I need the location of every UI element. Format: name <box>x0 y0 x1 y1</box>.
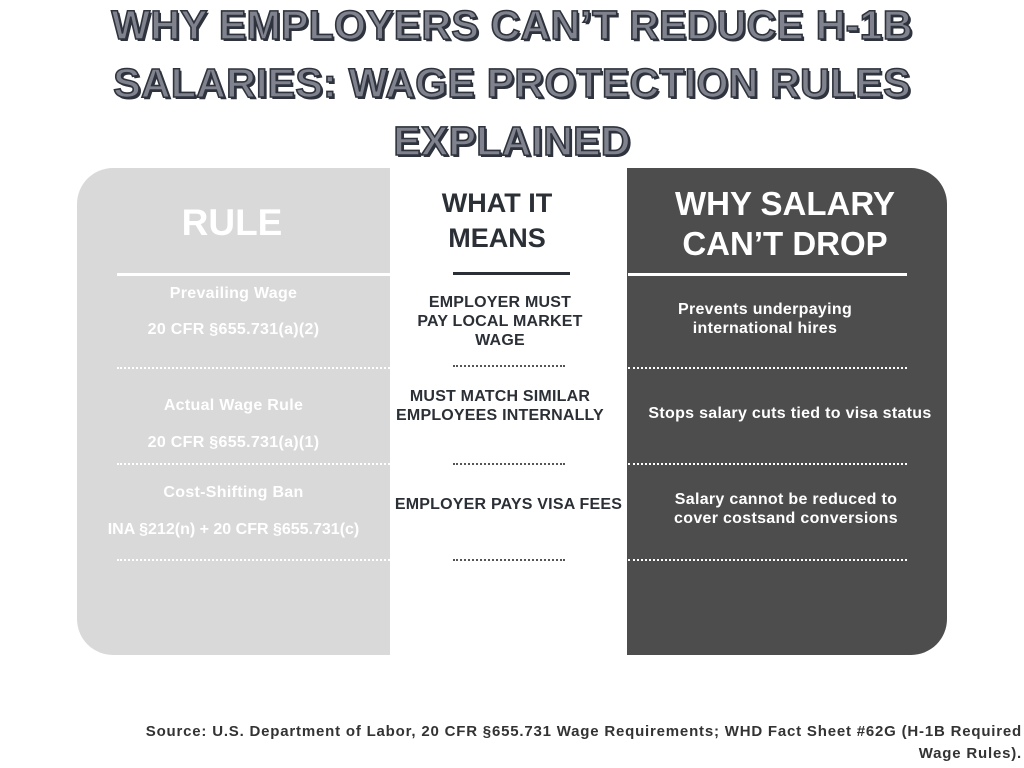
text: cost-shifting: Cost-Shifting Ban <box>163 484 304 501</box>
panel: what it means <box>390 168 627 655</box>
text: cannot be reduced: cover costsand conversions <box>674 510 898 527</box>
text: prevailing wage: Prevailing Wage <box>170 285 297 302</box>
text: cost cite: INA §212(n) + 20 CFR §655.731(c) <box>108 521 359 538</box>
heading: rule: RULE <box>182 202 282 243</box>
title <box>110 2 913 164</box>
text: local market wage <box>417 294 583 349</box>
panel: rule <box>77 168 417 655</box>
text: prevents underpaying <box>678 301 852 337</box>
heading: what it means: MEANS <box>448 223 546 253</box>
text: cannot be reduced <box>674 491 898 527</box>
text: local market wage: PAY LOCAL MARKET <box>417 313 583 330</box>
text: match similar: MUST MATCH SIMILAR <box>410 388 590 405</box>
text: stops salary cuts: Stops salary cuts tied to visa status <box>648 405 932 422</box>
title: EXPLAINED <box>393 118 631 164</box>
source note: Wage Rules). <box>919 745 1022 762</box>
title: SALARIES: WAGE PROTECTION RULES <box>113 60 911 106</box>
text: prevents underpaying: Prevents underpaying <box>678 301 852 318</box>
text: visa fees: EMPLOYER PAYS VISA FEES <box>395 496 622 513</box>
text: local market wage: WAGE <box>475 332 525 349</box>
text: actual cite: 20 CFR §655.731(a)(1) <box>148 434 319 451</box>
text: prevailing cite: 20 CFR §655.731(a)(2) <box>148 321 319 338</box>
panel: why salary can't drop <box>627 168 947 655</box>
source note <box>146 723 1022 762</box>
heading: what it means <box>442 188 552 253</box>
text: match similar <box>396 388 604 424</box>
text: actual wage: Actual Wage Rule <box>164 397 303 414</box>
heading: what it means: WHAT IT <box>442 188 552 218</box>
text: prevents underpaying: international hires <box>693 320 837 337</box>
text: cannot be reduced: Salary cannot be reduced to <box>675 491 897 508</box>
text: local market wage: EMPLOYER MUST <box>429 294 571 311</box>
text: match similar: EMPLOYEES INTERNALLY <box>396 407 604 424</box>
title: WHY EMPLOYERS CAN’T REDUCE H-1B <box>111 2 913 48</box>
heading: why salary: WHY SALARY <box>675 185 895 222</box>
source note: Source: U.S. Department of Labor, 20 CFR §655.731 Wage Requirements; WHD Fact Sheet #62G (H-1B Required <box>146 723 1022 740</box>
heading: why salary <box>675 185 895 262</box>
heading: why salary: CAN’T DROP <box>682 225 888 262</box>
